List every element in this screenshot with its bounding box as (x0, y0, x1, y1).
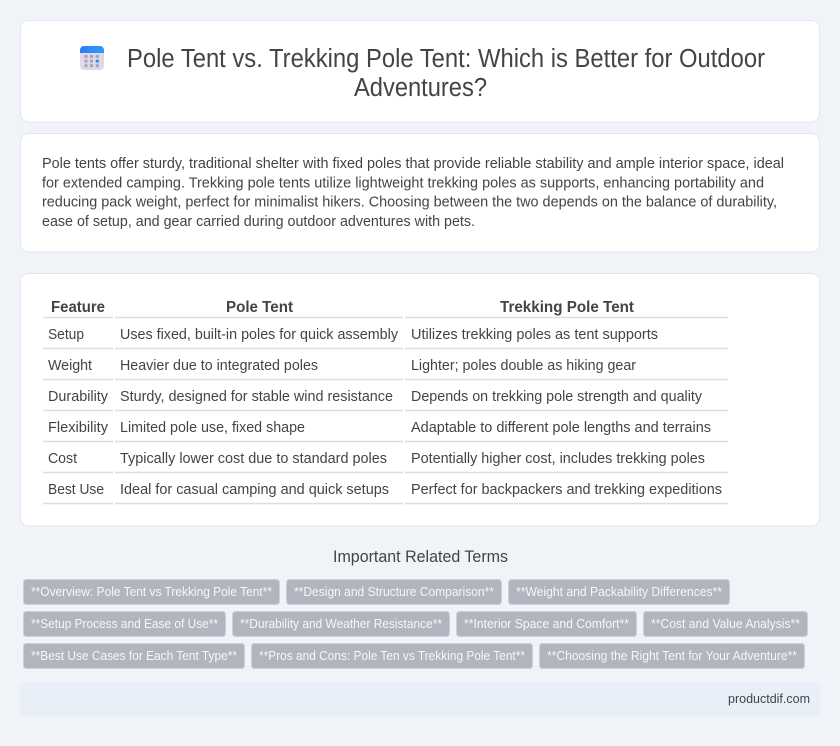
row: weight (48, 357, 636, 374)
tag: cost (644, 612, 808, 636)
row: cost: Potentially higher cost, includes trekking poles (411, 450, 705, 467)
tag: weight (508, 580, 730, 604)
table header: Feature (51, 299, 105, 316)
tag: durability (232, 612, 450, 636)
row: flexibility: Limited pole use, fixed shape (120, 419, 305, 436)
tag: cost: **Cost and Value Analysis** (651, 616, 800, 631)
row: durability (48, 388, 702, 405)
title: Pole Tent vs. Trekking Pole Tent: Which is Better for Outdoor (127, 45, 765, 73)
row: flexibility (48, 419, 711, 436)
tag: pros and cons: **Pros and Cons: Pole Ten vs Trekking Pole Tent** (259, 648, 525, 663)
row: setup: Uses fixed, built-in poles for quick assembly (120, 326, 398, 343)
table header: Pole Tent (226, 299, 294, 316)
tag: design: **Design and Structure Comparison** (294, 584, 494, 599)
row: cost (48, 450, 705, 467)
tag: choosing: **Choosing the Right Tent for Your Adventure** (547, 648, 797, 663)
row: setup: Utilizes trekking poles as tent supports (411, 326, 658, 343)
tag: setup (24, 612, 226, 636)
tag: best use: **Best Use Cases for Each Tent Type** (31, 648, 237, 663)
row: cost: Cost (48, 450, 78, 467)
tag: overview: **Overview: Pole Tent vs Trekking Pole Tent** (31, 584, 272, 599)
title (127, 45, 765, 102)
table header: Trekking Pole Tent (500, 299, 635, 316)
table header (51, 299, 635, 316)
row: setup: Setup (48, 326, 84, 343)
row: weight: Heavier due to integrated poles (120, 357, 318, 374)
tag: design (286, 580, 502, 604)
row: best use: Best Use (48, 481, 104, 498)
panel: summary text (20, 134, 820, 252)
tag: choosing (540, 644, 804, 668)
tag: weight: **Weight and Packability Differences** (516, 584, 722, 599)
row: cost: Typically lower cost due to standard poles (120, 450, 387, 467)
row: flexibility: Adaptable to different pole lengths and terrains (411, 419, 711, 436)
row: best use: Ideal for casual camping and quick setups (120, 481, 389, 498)
tag: setup: **Setup Process and Ease of Use** (31, 616, 218, 631)
summary paragraph: for extended camping. Trekking pole tents utilize lightweight trekking poles as supports, enhancing portability and (42, 174, 764, 191)
tag: overview (24, 580, 280, 604)
footer source: productdif.com (728, 691, 810, 706)
tag: durability: **Durability and Weather Resistance** (240, 616, 442, 631)
tag: interior: **Interior Space and Comfort** (464, 616, 629, 631)
tags: related terms (24, 580, 808, 668)
row: durability: Durability (48, 388, 108, 405)
tag: best use (24, 644, 244, 668)
footer bar (20, 682, 820, 716)
row: weight: Weight (48, 357, 93, 374)
panel: title header (20, 20, 820, 122)
row: weight: Lighter; poles double as hiking gear (411, 357, 636, 374)
summary paragraph: reducing pack weight, perfect for minimalist hikers. Choosing between the two depends on the balance of durability, (42, 194, 777, 211)
row: durability: Sturdy, designed for stable wind resistance (120, 388, 393, 405)
icon: calendar (80, 46, 104, 70)
row: best use (48, 481, 722, 498)
title: Adventures? (354, 74, 487, 102)
row: setup (48, 326, 658, 343)
tag: interior (456, 612, 636, 636)
summary paragraph: Pole tents offer sturdy, traditional shelter with fixed poles that provide reliable stability and ample interior space, ideal (42, 155, 784, 172)
row: flexibility: Flexibility (48, 419, 108, 436)
tag: pros and cons (252, 644, 532, 668)
summary paragraph (42, 155, 784, 230)
heading: related terms: Important Related Terms (333, 548, 508, 566)
summary paragraph: ease of setup, and gear carried during outdoor adventures with pets. (42, 213, 475, 230)
row: best use: Perfect for backpackers and trekking expeditions (411, 481, 722, 498)
panel: comparison table (20, 274, 820, 526)
row: durability: Depends on trekking pole strength and quality (411, 388, 702, 405)
